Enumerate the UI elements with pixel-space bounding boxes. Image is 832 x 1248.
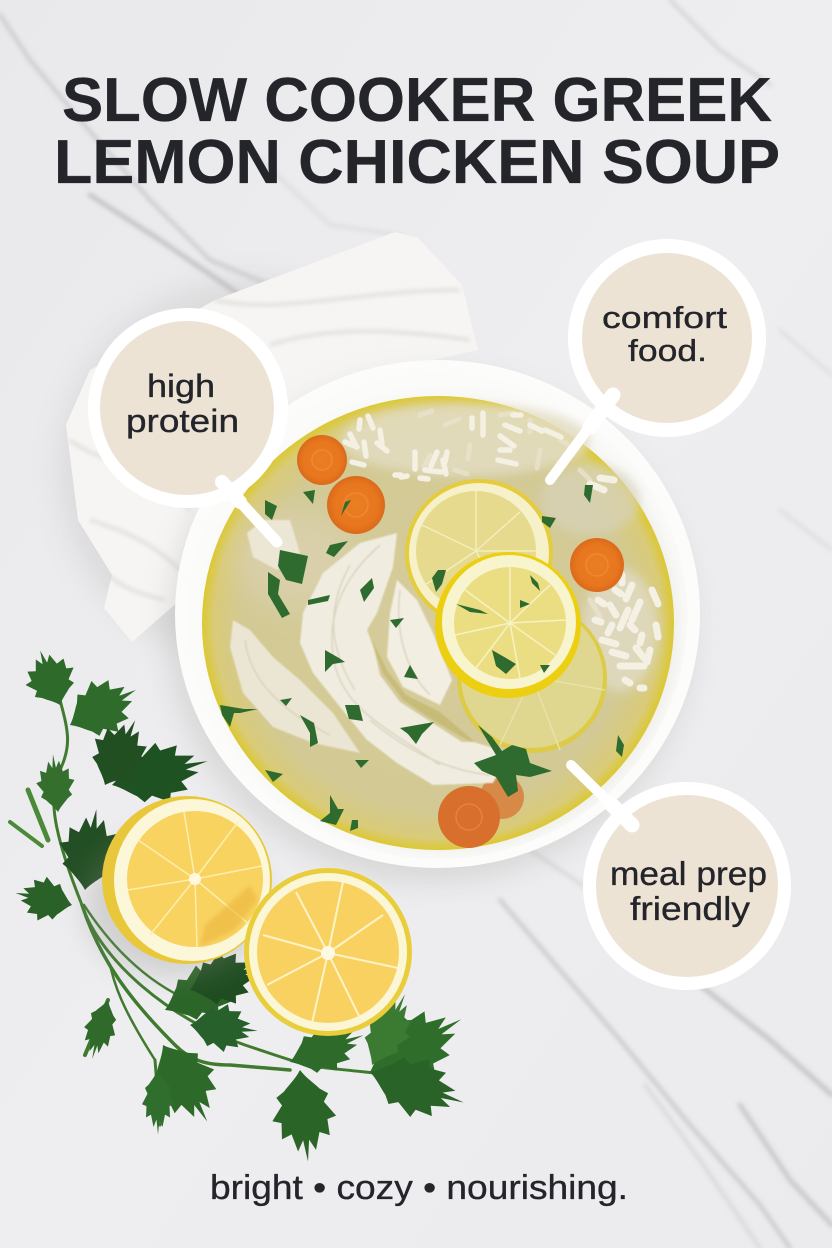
submerged lemon slice	[457, 603, 607, 753]
callout: high protein: high	[147, 368, 215, 404]
soup broth	[202, 396, 674, 850]
chopped parsley in soup	[220, 485, 624, 831]
chicken pieces	[230, 520, 510, 785]
callout: high protein: protein	[126, 403, 239, 439]
rice	[345, 411, 658, 688]
title: SLOW COOKER GREEK	[62, 66, 772, 135]
callout: comfort food: food.	[628, 333, 707, 368]
lemon half left	[85, 796, 272, 977]
title	[54, 66, 780, 197]
callout: meal prep friendly: meal prep	[610, 855, 767, 892]
callout: comfort food: comfort	[602, 300, 727, 335]
callout: comfort food	[550, 239, 766, 480]
callout: high protein	[88, 308, 288, 542]
lemon slice top	[405, 479, 553, 627]
napkin	[60, 232, 478, 660]
title: LEMON CHICKEN SOUP	[54, 128, 780, 197]
parsley sprigs	[10, 642, 478, 1164]
carrot slices	[297, 435, 624, 848]
bowl	[10, 360, 700, 1164]
tagline: bright • cozy • nourishing.	[210, 1169, 628, 1207]
lemon half right	[244, 868, 412, 1036]
callout: meal prep friendly: friendly	[630, 890, 751, 927]
callout: meal prep friendly	[571, 765, 791, 990]
lemon slice front	[435, 552, 581, 698]
